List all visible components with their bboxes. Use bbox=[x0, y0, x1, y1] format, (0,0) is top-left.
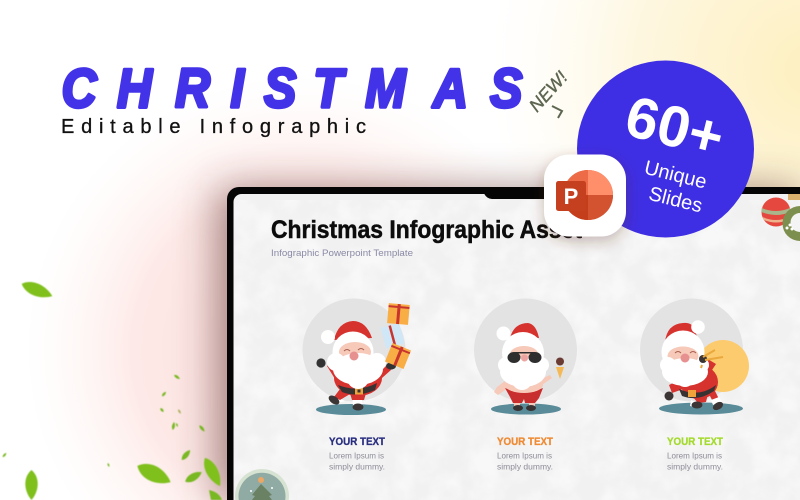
badge caption: Slides bbox=[646, 183, 705, 217]
title: CHRISTMAS: CHRISTMAS bbox=[62, 57, 523, 119]
badge number: 60+ bbox=[619, 84, 730, 171]
santa with gifts bbox=[302, 298, 411, 415]
gift boxes bbox=[381, 303, 411, 369]
label: NEW!: NEW! bbox=[525, 67, 571, 116]
badge caption bbox=[642, 157, 709, 217]
santa column 2 text: YOUR TEXT bbox=[497, 436, 553, 448]
badge caption: Unique bbox=[642, 157, 709, 194]
letter P: P bbox=[564, 184, 578, 209]
santa column 2 text: simply dummy. bbox=[497, 462, 553, 472]
santa column 1 text bbox=[329, 436, 385, 472]
santa column 1 text: simply dummy. bbox=[329, 462, 385, 472]
snow globe bbox=[235, 469, 289, 500]
christmas wreath bbox=[782, 206, 800, 241]
badge: 60+ unique slides bbox=[577, 60, 754, 238]
santa column 1 text: Lorem Ipsum is bbox=[329, 452, 384, 460]
christmas ornament bbox=[761, 194, 800, 226]
subtitle: Editable Infographic: Editable Infographic bbox=[61, 116, 366, 138]
laptop mockup bbox=[218, 187, 800, 500]
slide subheading: Infographic Powerpoint Template bbox=[271, 248, 413, 259]
santa column 3 text bbox=[667, 436, 723, 472]
powerpoint icon bbox=[544, 154, 626, 236]
ice cream bbox=[556, 358, 564, 379]
sunglasses bbox=[508, 352, 542, 363]
santa column 3 text: YOUR TEXT bbox=[667, 436, 723, 448]
santa column 2 text: Lorem Ipsum is bbox=[497, 452, 552, 460]
santa column 1 text: YOUR TEXT bbox=[329, 436, 385, 448]
santa carrying sack bbox=[640, 298, 749, 414]
santa with sunglasses and ice cream bbox=[474, 298, 577, 414]
santa column 3 text: Lorem Ipsum is bbox=[667, 452, 722, 460]
santa column 2 text bbox=[497, 436, 553, 472]
falling leaves bbox=[2, 278, 225, 500]
santa column 3 text: simply dummy. bbox=[667, 462, 723, 472]
slide heading: Christmas Infographic Asset bbox=[271, 216, 583, 244]
